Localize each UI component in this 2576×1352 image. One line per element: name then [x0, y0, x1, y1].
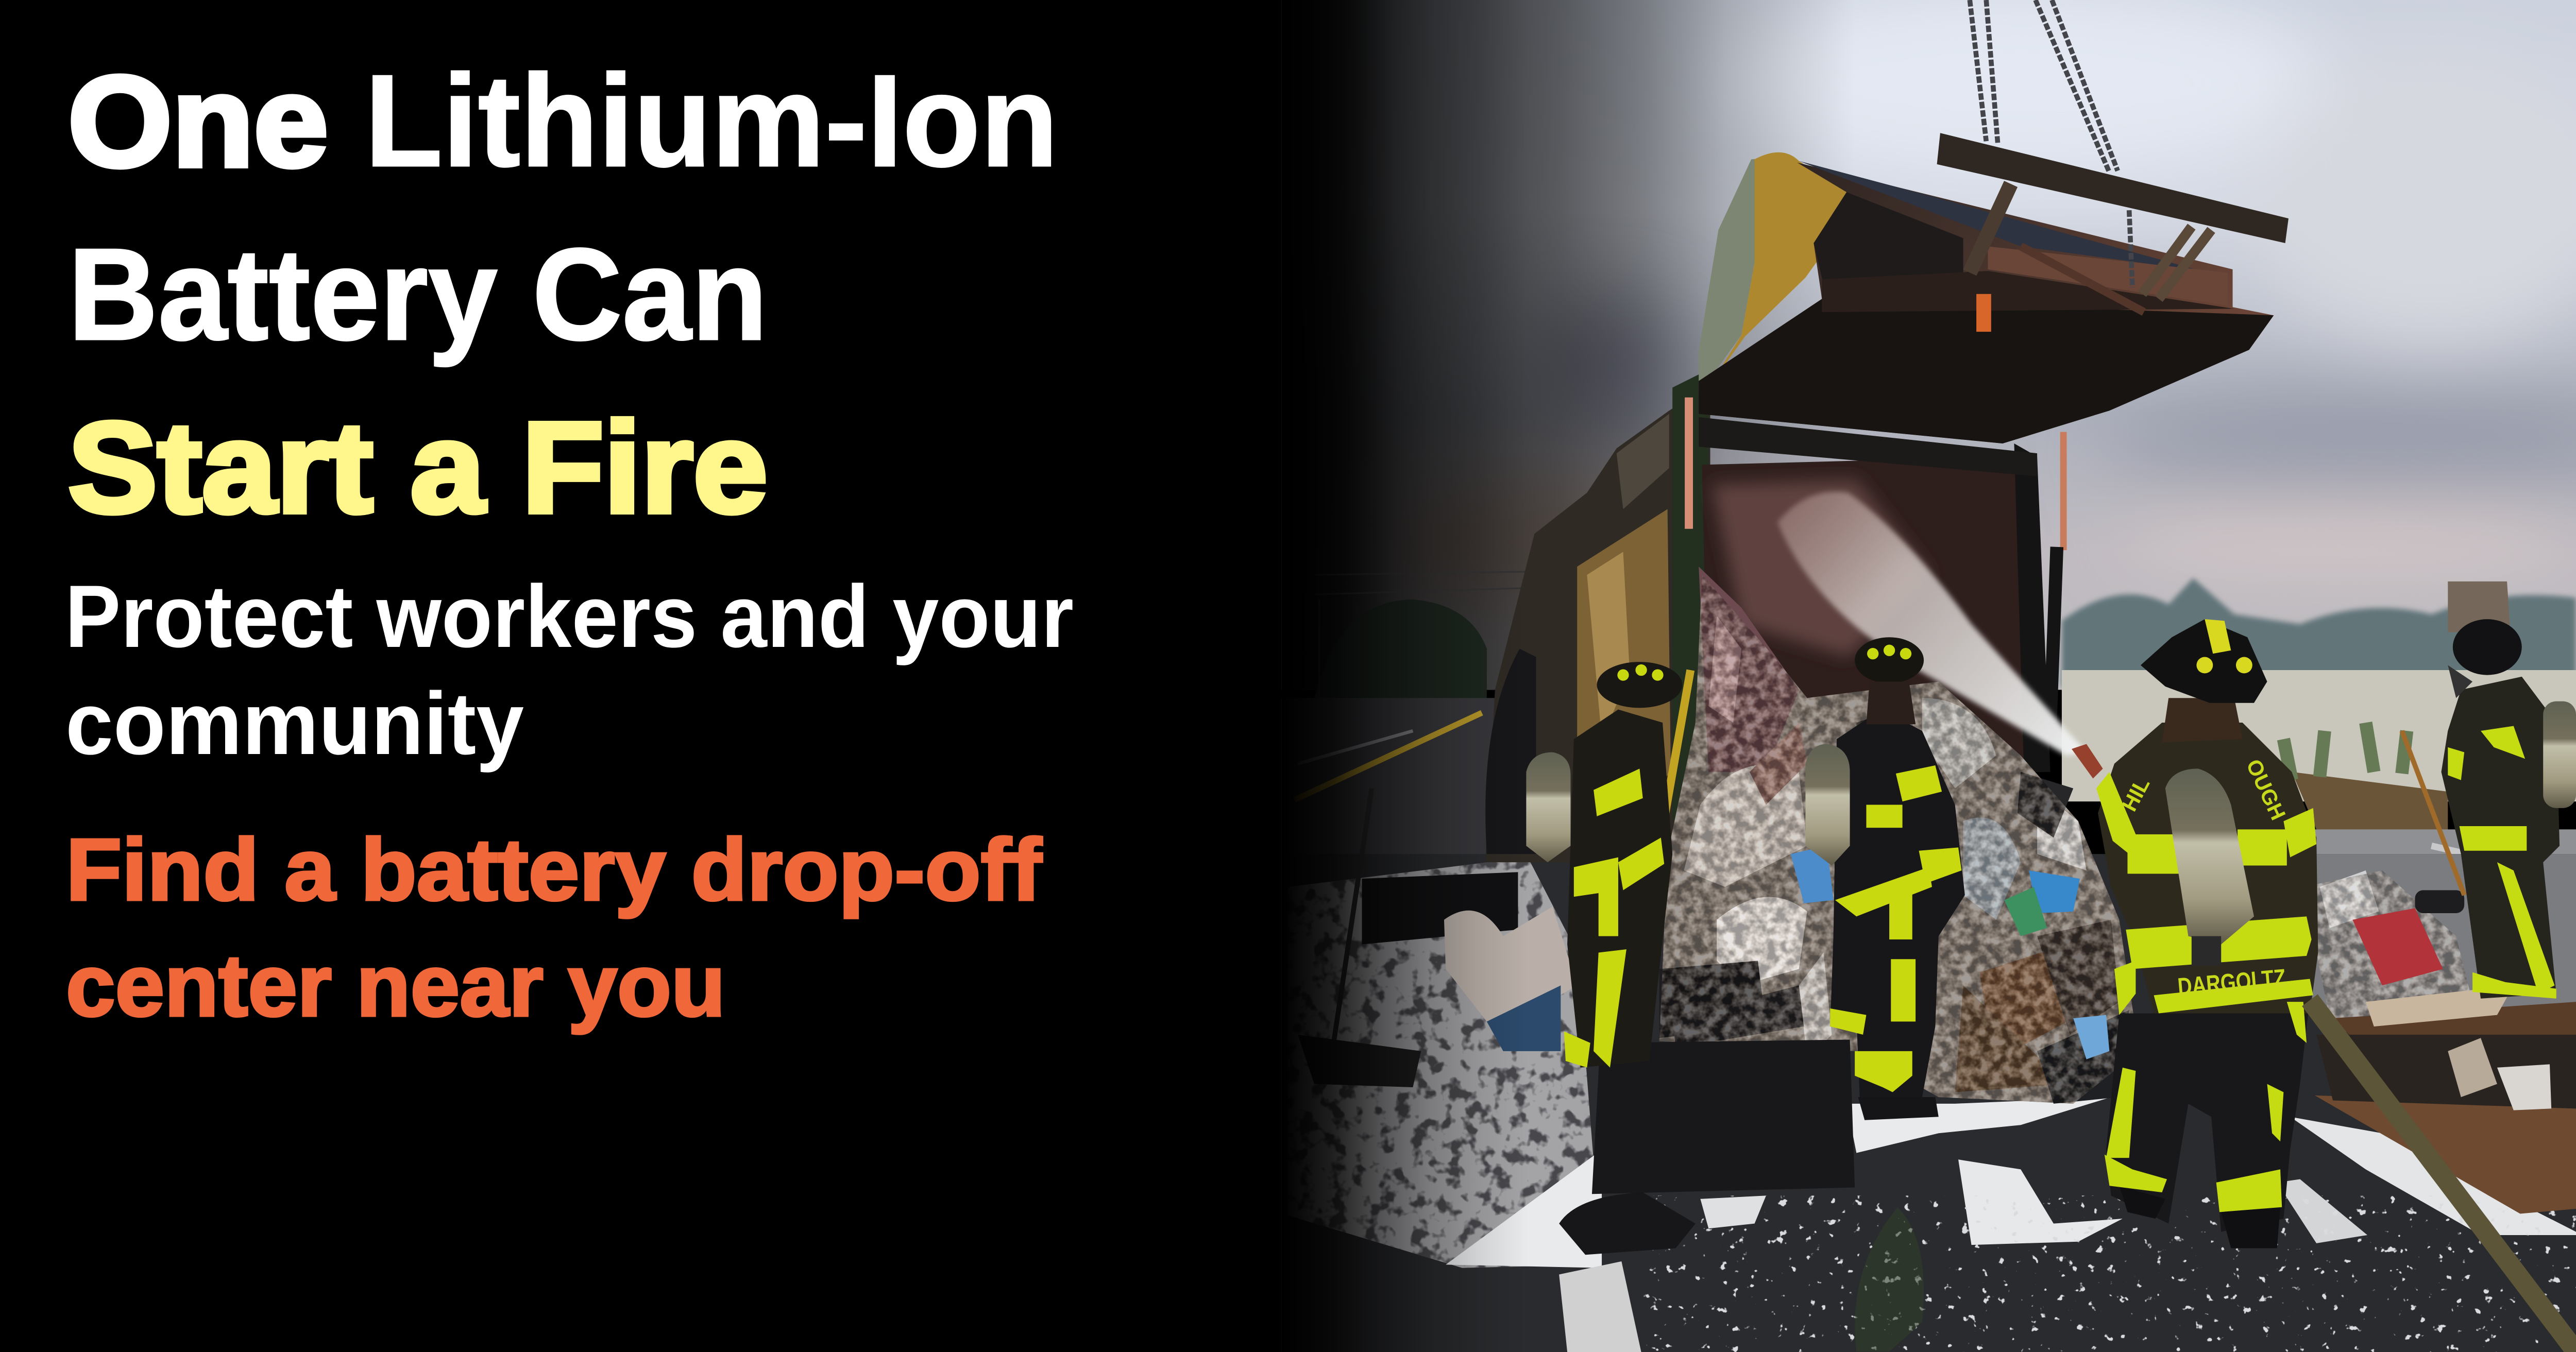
road and foam	[1281, 698, 2576, 1352]
firefighter foreground with HILLSBOROUGH / DARGOLTZ coat	[2072, 619, 2318, 1248]
call to action: Find a battery drop-off center near you: center near you	[66, 937, 725, 1035]
title: One Lithium-Ion Battery Can Start a Fire: Start a Fire	[68, 396, 768, 539]
firefighter foreground with HILLSBOROUGH / DARGOLTZ coat: OUGH	[2242, 756, 2291, 824]
tailgate	[1699, 152, 2274, 443]
left black fade over the photo	[1281, 0, 1528, 1352]
garbage pile	[1659, 567, 2139, 1104]
subheading: Protect workers and your community: Protect workers and your	[65, 567, 1074, 666]
firefighter foreground with HILLSBOROUGH / DARGOLTZ coat: DARGOLTZ	[2177, 964, 2287, 1001]
title: One Lithium-Ion Battery Can Start a Fire: One	[68, 49, 328, 193]
background trees and field	[1314, 572, 2576, 961]
subheading: Protect workers and your community	[65, 567, 1074, 773]
struts	[1688, 398, 1690, 529]
firefighter far right	[2402, 619, 2576, 999]
title: One Lithium-Ion Battery Can Start a Fire: Battery Can	[68, 221, 768, 367]
hopper interior	[1702, 456, 2047, 772]
title: One Lithium-Ion Battery Can Start a Fire	[68, 47, 1058, 539]
water spray	[1777, 492, 2087, 756]
lifting bar and brackets	[1937, 133, 2289, 312]
foam-covered bags and black bin at left	[1298, 789, 1577, 1087]
black bin in foreground	[1592, 1039, 1855, 1194]
garbage truck with raised tailgate	[1485, 0, 2289, 862]
firefighter centre	[1805, 637, 1965, 1120]
fire hose	[2310, 1000, 2576, 1351]
crane chains	[1970, 0, 2132, 287]
dark bag on road	[1559, 1192, 1696, 1255]
call to action: Find a battery drop-off center near you: Find a battery drop-off	[66, 821, 1042, 919]
title: One Lithium-Ion Battery Can Start a Fire: Lithium-Ion	[365, 47, 1058, 194]
firefighter left	[1526, 662, 1690, 1068]
firefighter foreground with HILLSBOROUGH / DARGOLTZ coat: HIL	[2117, 774, 2155, 815]
subheading: Protect workers and your community: community	[65, 674, 524, 773]
truck body	[1485, 369, 1710, 862]
call to action: Find a battery drop-off center near you	[66, 821, 1042, 1035]
debris pile at right	[2303, 870, 2576, 1214]
sky	[1281, 0, 2576, 690]
